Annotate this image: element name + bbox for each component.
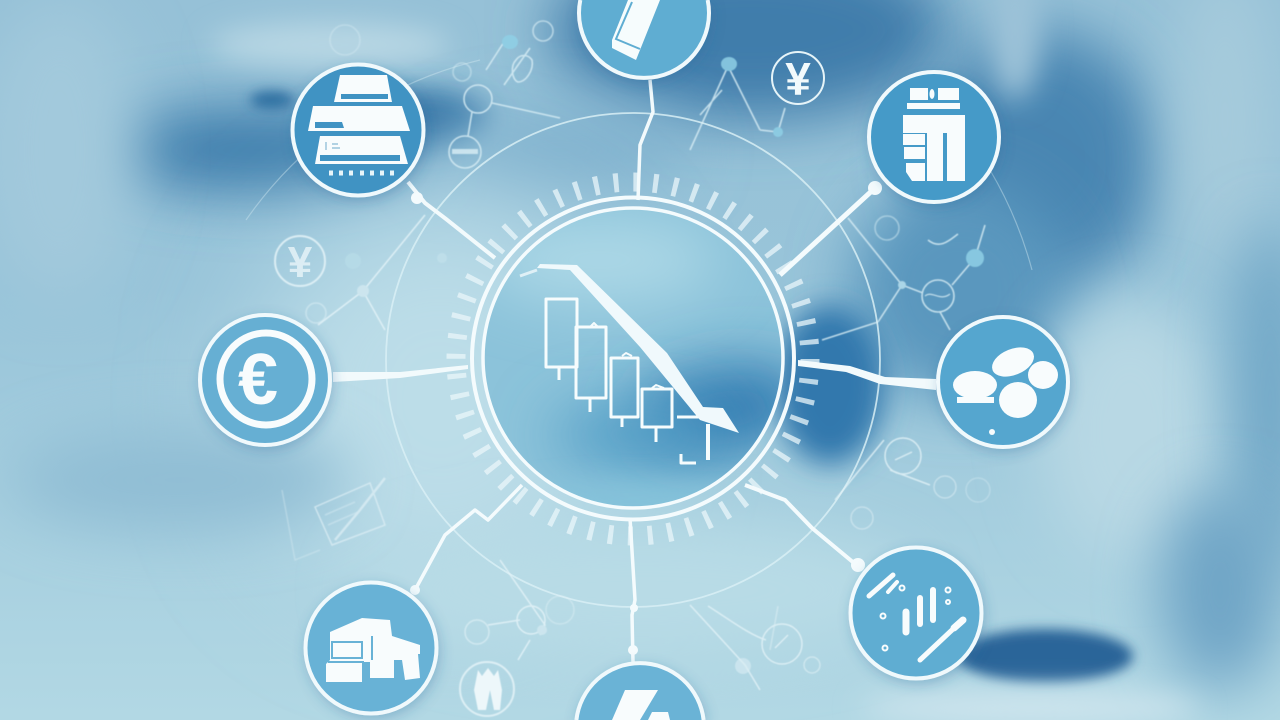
icon: euro sign: € bbox=[238, 340, 278, 420]
icon: faint document lower left bbox=[282, 478, 385, 560]
large thin orbit ring bbox=[386, 113, 880, 607]
node: top right bbox=[869, 72, 999, 202]
connector: bottom left bbox=[415, 485, 522, 590]
icon: bars and tools bbox=[869, 575, 963, 660]
node: bottom right bbox=[850, 548, 982, 678]
node: right bbox=[938, 317, 1068, 447]
satellite network: bottom left bbox=[460, 560, 574, 716]
connector: top bbox=[638, 80, 653, 200]
hub fill bbox=[484, 210, 782, 506]
icon: yen coin left: ¥ bbox=[288, 238, 313, 287]
satellite network: upper left bbox=[330, 21, 560, 168]
icon: ledger blocks bbox=[903, 88, 965, 181]
connector: bottom bbox=[630, 518, 635, 662]
connector: top left bbox=[408, 182, 495, 258]
candlestick chart bbox=[546, 299, 708, 463]
node: top left bbox=[292, 64, 424, 196]
icon: stacked trays bbox=[308, 75, 410, 173]
connector: right bbox=[798, 360, 936, 390]
icon: yen coin upper right: ¥ bbox=[785, 53, 811, 105]
node: bottom bbox=[576, 663, 704, 720]
connector: top right bbox=[780, 188, 875, 275]
outer faint arc bbox=[246, 60, 1032, 270]
icon: yen coin upper right bbox=[772, 52, 824, 105]
radial tick marks around hub bbox=[456, 182, 810, 536]
connector knobs bbox=[410, 181, 882, 655]
hub rings bbox=[472, 198, 794, 520]
node: left bbox=[200, 315, 330, 445]
connector: left bbox=[333, 365, 468, 382]
icon: euro ring bbox=[220, 333, 312, 425]
satellite network: right bbox=[822, 216, 985, 340]
satellite network: upper right bbox=[690, 57, 785, 150]
satellite network: bottom right bbox=[690, 438, 990, 690]
connector: bottom right bbox=[745, 485, 860, 568]
node: top bbox=[579, 0, 709, 78]
icon: ingot bbox=[612, 0, 660, 60]
icon: stacked boxes bbox=[326, 618, 420, 682]
icon: coins bbox=[953, 342, 1058, 435]
satellite network: left bbox=[275, 215, 447, 330]
central hub bbox=[472, 198, 820, 523]
node: bottom left bbox=[306, 582, 436, 714]
falling arrow bbox=[520, 264, 739, 433]
icon: ingot bbox=[612, 690, 658, 720]
